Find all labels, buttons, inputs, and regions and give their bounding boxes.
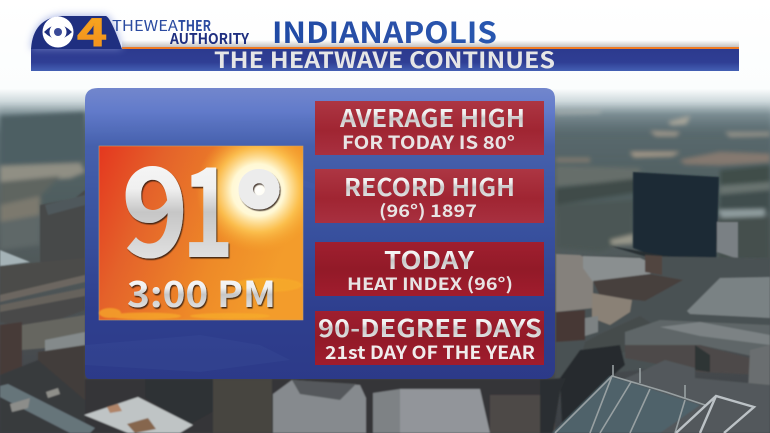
tagline: The Weather Authority: AUTHORITY xyxy=(169,28,249,49)
stat box: today heat index xyxy=(315,241,544,296)
canopy frame lines xyxy=(555,365,705,433)
temperature tile xyxy=(99,113,303,320)
blue subtitle band xyxy=(31,49,739,71)
mid-distance ground xyxy=(555,255,770,378)
grey bevel above band xyxy=(122,40,739,47)
temperature reading: 1 xyxy=(182,113,234,293)
stat heading: 90-DEGREE DAYS xyxy=(318,309,542,344)
logo tab glow xyxy=(31,15,122,49)
header banner xyxy=(31,2,739,75)
stat heading: RECORD HIGH xyxy=(344,168,515,203)
stat detail: FOR TODAY IS 80° xyxy=(342,129,515,155)
tagline: The Weather Authority: THER xyxy=(178,15,211,36)
temperature reading: 9 xyxy=(121,113,189,293)
tower xyxy=(633,172,719,270)
stat detail: 21st DAY OF THE YEAR xyxy=(325,339,535,365)
canopy xyxy=(610,360,770,433)
orange rule xyxy=(122,47,739,49)
stat detail: (96°) 1897 xyxy=(379,197,477,222)
sun glow xyxy=(190,146,303,271)
temperature reading xyxy=(121,113,234,293)
channel number 4: 4 xyxy=(77,2,107,57)
time of reading: 3:00 PM xyxy=(127,266,276,318)
stat heading: AVERAGE HIGH xyxy=(339,99,525,134)
tagline: The Weather Authority: THEWEA xyxy=(112,15,179,36)
main blue panel xyxy=(85,88,555,379)
icon: CBS eye xyxy=(42,16,74,48)
logo tab xyxy=(31,16,122,49)
stat heading: TODAY xyxy=(384,241,475,276)
subtitle: THE HEATWAVE CONTINUES xyxy=(214,43,555,75)
stat box: average high xyxy=(315,99,544,155)
panel texture streaks xyxy=(85,118,315,372)
city heading: INDIANAPOLIS xyxy=(272,10,497,52)
clouds at base of tile xyxy=(99,278,302,320)
stat box: 90-degree days xyxy=(315,309,544,365)
degree symbol: ° xyxy=(237,149,281,274)
stat box: record high xyxy=(315,168,544,223)
stat detail: HEAT INDEX (96°) xyxy=(347,270,513,295)
white roof frame xyxy=(676,396,754,433)
tagline: The Weather Authority xyxy=(112,15,249,49)
